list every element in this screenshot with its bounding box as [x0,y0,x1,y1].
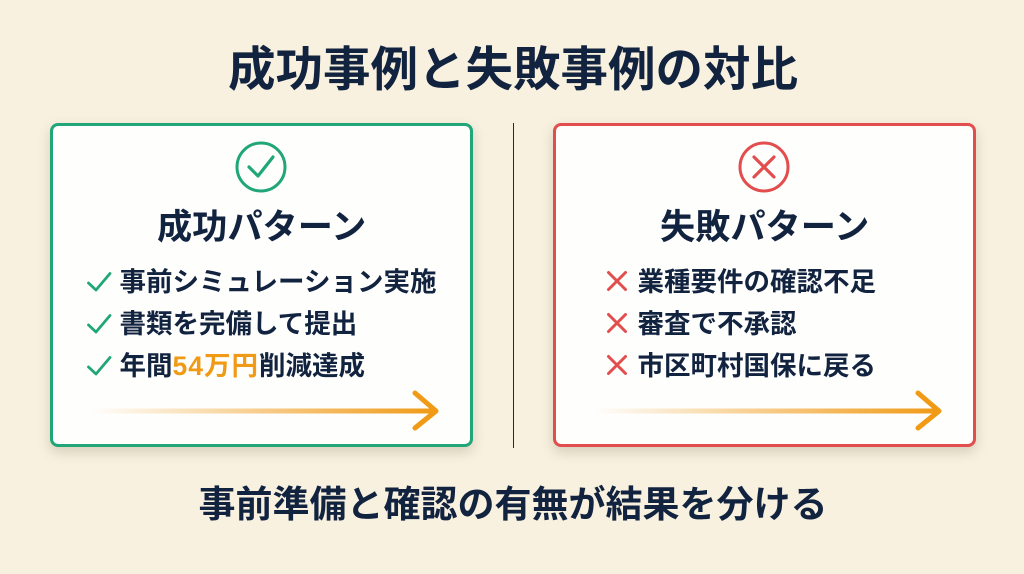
failure item 3: 市区町村国保に戻る [638,351,876,381]
heading: failure pattern: 失敗パターン [660,208,869,247]
success item 3: 年間54万円削減達成 [120,351,365,381]
panel: success pattern [50,123,473,447]
success item 1: 事前シミュレーション実施 [120,267,436,297]
arrow: failure [606,390,942,430]
title: 成功事例と失敗事例の対比 [228,44,798,97]
icon: failure cross circle [738,142,790,192]
icon: success check circle [236,142,286,192]
success item 2: 書類を完備して提出 [120,309,357,339]
panel: failure pattern [553,123,976,447]
divider [512,123,514,448]
heading: success pattern: 成功パターン [157,208,366,247]
failure item 1: 業種要件の確認不足 [638,267,876,297]
arrow: success [103,390,438,430]
failure item 2: 審査で不承認 [638,309,796,339]
bottom conclusion: 事前準備と確認の有無が結果を分ける [198,484,828,525]
